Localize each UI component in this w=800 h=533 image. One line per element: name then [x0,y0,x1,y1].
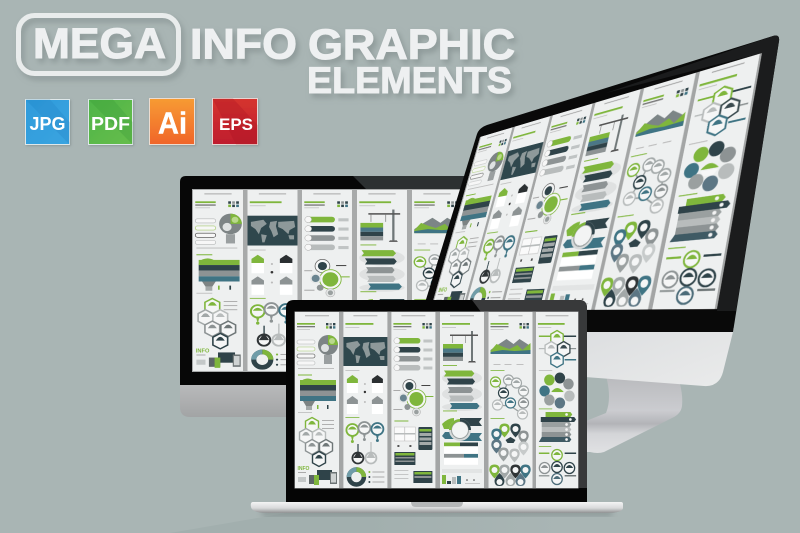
left monitor bezel [180,176,480,385]
laptop base [251,502,623,513]
right monitor chin [585,328,734,386]
icon: JPG: JPG [30,114,66,134]
icon: PDF: PDF [91,114,130,134]
lid glare [472,300,587,488]
icon: Ai: Ai [158,106,187,140]
laptop shadow [262,510,612,516]
laptop lid [286,300,587,503]
title: MEGA badge: MEGA [33,20,166,68]
right monitor screen: infographic columns in perspective [433,53,762,310]
left monitor [180,176,480,417]
title: INFO GRAPHIC: GRAPHIC [308,21,515,69]
icon: PDF [88,100,132,144]
right monitor stand [586,376,682,453]
title: MEGA badge [18,16,178,74]
icon: Ai [150,98,194,144]
icon: EPS: EPS [219,115,253,134]
title: INFO GRAPHIC: INFO [190,20,297,68]
title: ELEMENTS: ELEMENTS [307,60,512,101]
laptop screen [294,312,578,488]
icon: EPS [212,98,258,144]
right monitor bezel [416,36,779,332]
laptop notch [411,502,463,507]
left monitor screen: infographic columns [193,190,462,371]
icon: JPG [26,100,70,144]
left monitor chin [180,380,480,417]
floor shadow [170,513,560,533]
title: INFO GRAPHIC [190,20,515,69]
